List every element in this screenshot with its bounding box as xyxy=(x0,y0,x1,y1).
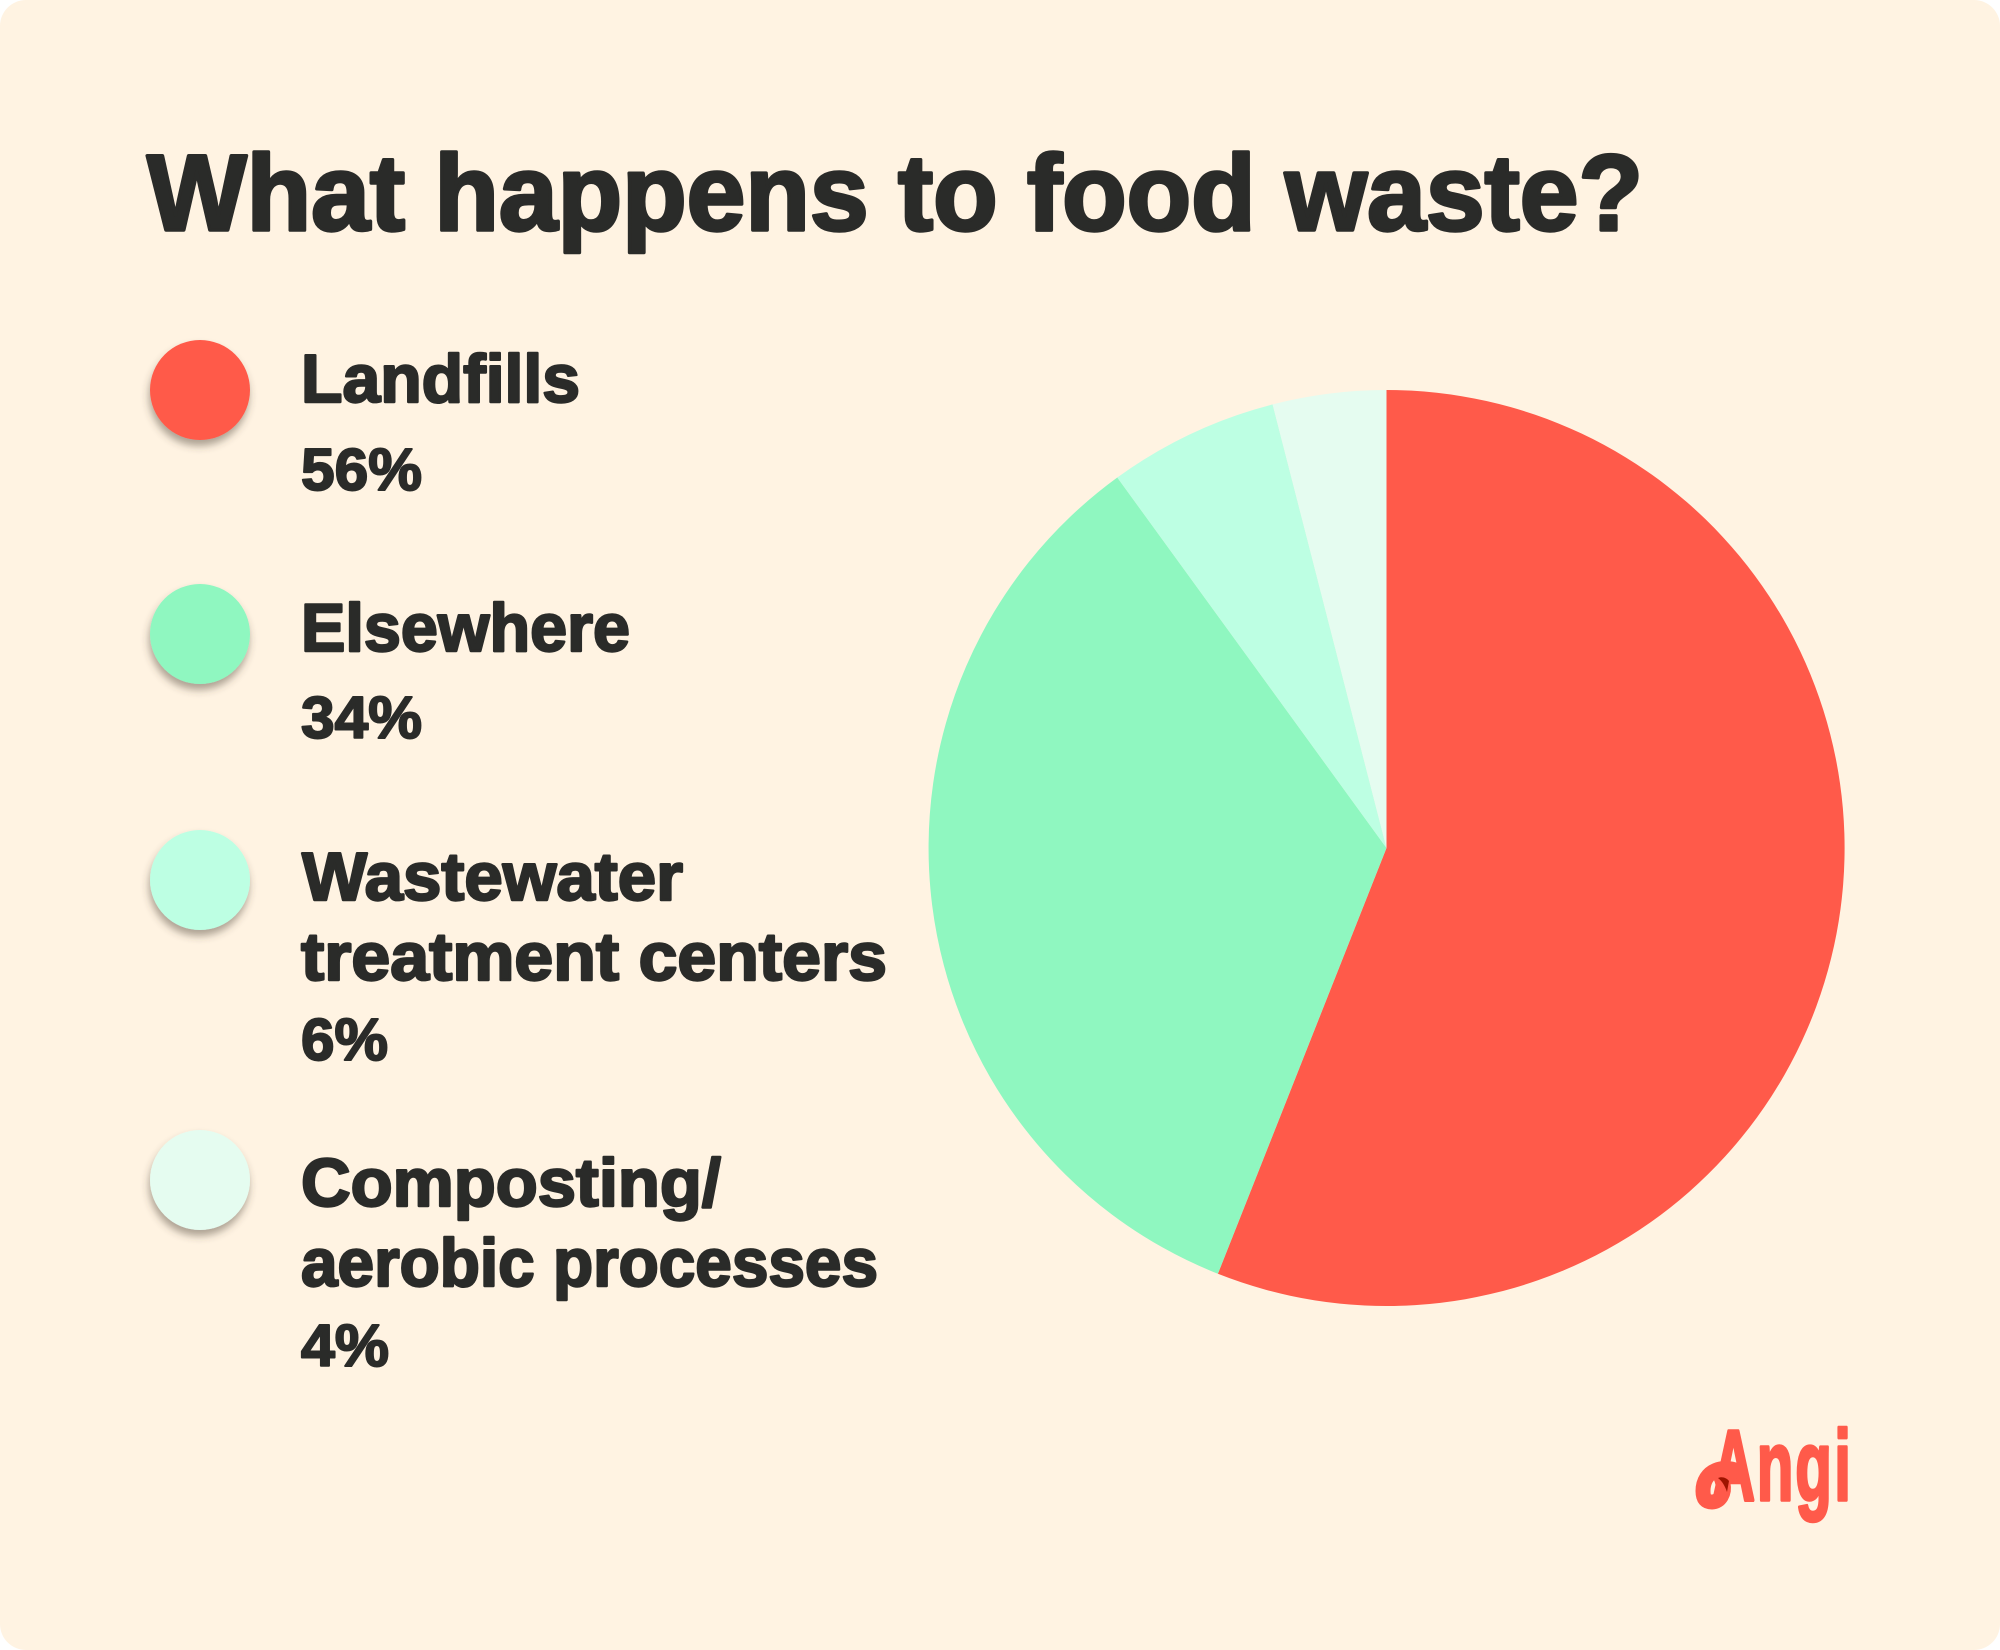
legend item: composting and aerobic processes xyxy=(150,1130,878,1379)
legend item: elsewhere xyxy=(150,584,630,751)
legend item: wastewater treatment centers: Wastewater xyxy=(302,839,683,915)
legend item: landfills xyxy=(150,340,580,503)
slice: landfills 56% xyxy=(1218,390,1845,1306)
pie chart xyxy=(929,390,1845,1306)
title: What happens to food waste? xyxy=(147,132,1643,253)
slice: elsewhere 34% xyxy=(929,478,1386,1274)
legend item: composting and aerobic processes: Composting/ xyxy=(301,1145,721,1221)
slice: composting 4% xyxy=(1273,390,1386,848)
legend item: wastewater treatment centers: 6% xyxy=(301,1007,388,1073)
slice: wastewater 6% xyxy=(1117,404,1386,848)
legend item: elsewhere: 34% xyxy=(301,685,422,751)
legend item: wastewater treatment centers: treatment centers xyxy=(301,919,887,995)
legend item: wastewater treatment centers xyxy=(150,830,887,1073)
legend xyxy=(150,340,887,1379)
logo: Angi: Angi xyxy=(1712,1410,1851,1522)
legend item: composting and aerobic processes: 4% xyxy=(301,1313,389,1379)
legend item: elsewhere: Elsewhere xyxy=(301,590,630,666)
legend item: landfills: Landfills xyxy=(301,341,580,417)
legend item: composting and aerobic processes: aerobic processes xyxy=(301,1225,878,1301)
legend item: landfills: 56% xyxy=(301,437,422,503)
